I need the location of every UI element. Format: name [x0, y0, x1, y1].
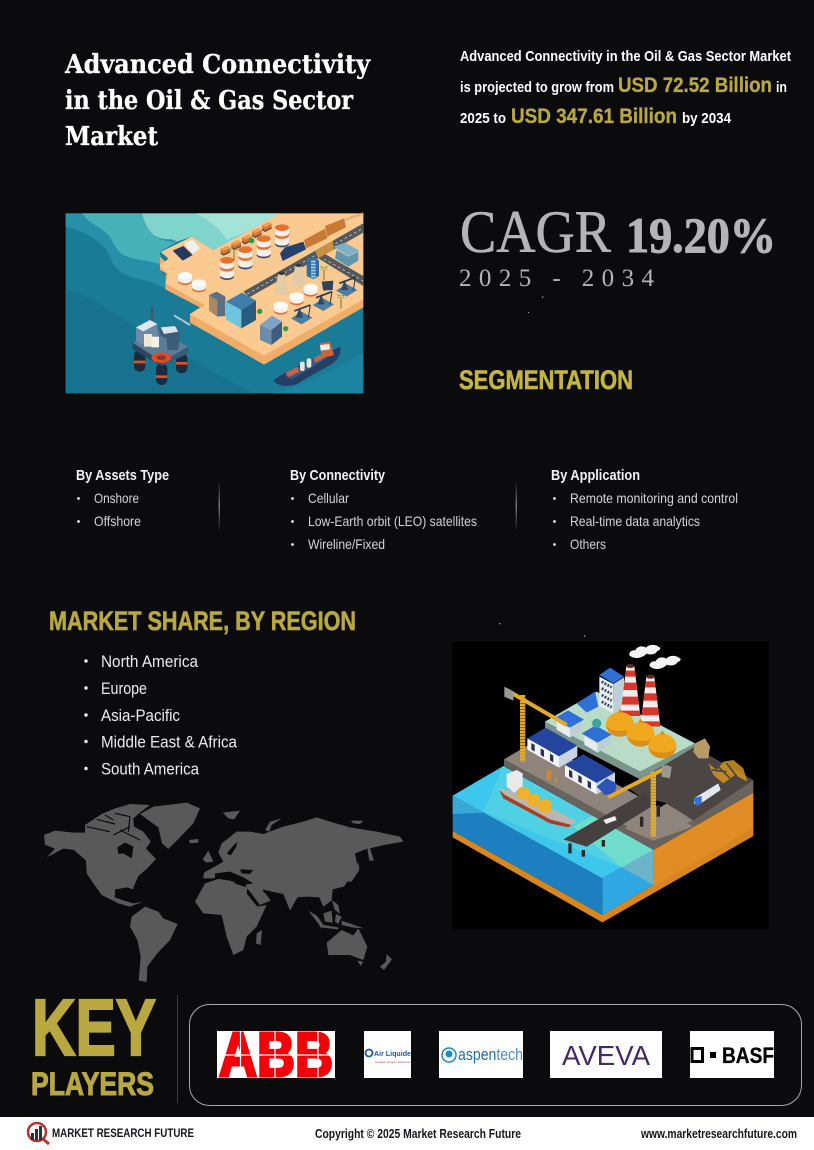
segment column: by connectivity: By Connectivity: [290, 467, 386, 484]
market size summary: 2025 to: [460, 110, 506, 127]
segment column: by assets type: [76, 467, 169, 529]
segmentation heading: SEGMENTATION: [459, 365, 633, 395]
footer logo icon: [28, 1123, 49, 1144]
workers: [547, 770, 558, 783]
segment column: by connectivity: Wireline/Fixed: [308, 536, 385, 552]
illustration: coastal oil terminal and offshore rig: [66, 213, 363, 393]
CAGR value: CAGR: [460, 199, 611, 265]
quay: [504, 759, 653, 850]
world map: [44, 803, 403, 982]
process buildings: [554, 710, 584, 738]
segment column: by application: Remote monitoring and control: [570, 490, 738, 506]
segment column: by connectivity: [290, 467, 477, 552]
spherical LNG domes: [606, 709, 634, 737]
logo: AVEVA: AVEVA: [562, 1040, 650, 1071]
region list: Asia-Pacific: [101, 706, 180, 725]
segment column: by application: Others: [570, 536, 606, 552]
market size summary: USD 347.61 Billion: [511, 105, 677, 128]
CAGR value: [459, 199, 776, 292]
warehouses: [527, 728, 577, 768]
tanker ship: [273, 342, 340, 386]
scrap pile and pipes: [708, 760, 747, 783]
land side faces: [160, 257, 363, 365]
key players heading: KEY: [32, 983, 156, 1072]
logo: BASF: BASF: [722, 1043, 774, 1068]
offshore rig: [133, 307, 190, 385]
key players heading: [31, 983, 156, 1102]
chimneys: [620, 664, 640, 716]
asphalt yard: [627, 747, 753, 821]
pier: [563, 793, 657, 847]
segment column: by connectivity: Cellular: [308, 490, 349, 506]
logo: BASF: [690, 1031, 774, 1078]
logo: Air Liquide: [364, 1031, 411, 1078]
logo: AVEVA: [550, 1031, 662, 1078]
key players heading: PLAYERS: [31, 1066, 154, 1102]
CAGR value: 19.20%: [626, 207, 776, 263]
soil block: [453, 828, 753, 922]
LNG tanker: [499, 770, 577, 827]
stray specks: [499, 296, 585, 637]
logo: Air Liquide: creative oxygen solutions: [375, 1060, 411, 1064]
storage tanks: [220, 257, 234, 280]
market share heading: MARKET SHARE, BY REGION: [49, 606, 356, 636]
logo: Air Liquide: Air Liquide: [374, 1049, 411, 1058]
market size summary: is projected to grow from: [460, 79, 614, 96]
title: Advanced Connectivity: [64, 50, 371, 80]
market size summary: by 2034: [682, 110, 732, 127]
region list: [84, 652, 237, 778]
market size summary: [460, 48, 791, 128]
green process platform: [545, 722, 695, 779]
region list: South America: [101, 760, 199, 778]
buildings: [209, 292, 225, 317]
title: in the Oil & Gas Sector: [65, 86, 353, 116]
illustration: LNG port cross-section: [452, 642, 768, 929]
road: [243, 223, 363, 297]
footer brand name: MARKET RESEARCH FUTURE: [52, 1126, 194, 1140]
region list: Middle East & Africa: [101, 732, 237, 752]
copyright: Copyright © 2025 Market Research Future: [315, 1126, 521, 1141]
segment column: by connectivity: Low-Earth orbit (LEO) satellites: [308, 513, 477, 529]
logo: aspentech: aspentech: [458, 1045, 523, 1064]
cooling towers: [274, 265, 306, 295]
small pier buildings: [173, 246, 193, 261]
logo: aspentech: [439, 1031, 523, 1078]
segment column: by application: [551, 467, 738, 552]
title: [64, 50, 371, 152]
water: [453, 796, 602, 915]
region list: Europe: [101, 679, 147, 698]
segment column: by assets type: By Assets Type: [76, 467, 169, 484]
segment column: by application: Real-time data analytics: [570, 513, 700, 529]
cranes: [507, 690, 668, 837]
footer: [0, 1117, 814, 1150]
train: [280, 218, 346, 261]
clouds: [629, 645, 660, 658]
rail: [340, 213, 363, 222]
market size summary: USD 72.52 Billion: [618, 74, 772, 97]
logo panel: [190, 1004, 802, 1106]
logo: ABB: ABB: [219, 1021, 333, 1090]
segment column: by assets type: Onshore: [94, 490, 139, 506]
dark seas cut out of the land: [87, 813, 272, 906]
region list: North America: [101, 652, 198, 671]
title: Market: [65, 122, 158, 152]
market size summary: in: [776, 79, 787, 96]
pump jacks and vegetation: [291, 305, 312, 324]
land top: [159, 213, 363, 356]
segment column: by assets type: Offshore: [94, 513, 141, 529]
segment column: by application: By Application: [551, 467, 640, 484]
fuel truck: [694, 783, 721, 805]
CAGR value: 2025 - 2034: [459, 265, 654, 292]
